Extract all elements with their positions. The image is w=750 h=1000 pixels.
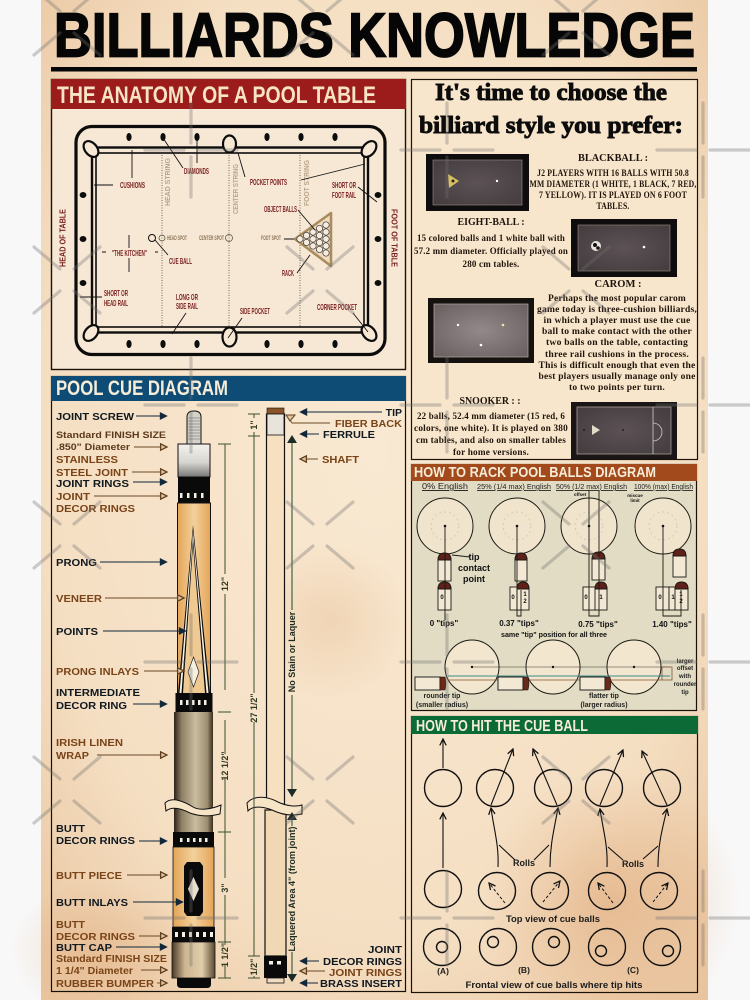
right cue labels [320, 407, 403, 990]
rack heading: HOW TO RACK POOL BALLS DIAGRAM [414, 464, 656, 481]
table labels: RACK [282, 268, 294, 278]
dimension labels: 1/2" [249, 959, 259, 975]
left cue labels: VENEER [56, 593, 102, 605]
frontal caption: Frontal view of cue balls where tip hits [466, 980, 642, 991]
lower diagram labels: (larger radius) [580, 702, 628, 709]
left cue labels [56, 411, 167, 990]
lower diagram: tip radius [415, 640, 672, 694]
row letters: (A) [437, 966, 449, 976]
tip contact point label: tip [468, 552, 480, 562]
stick numbers: 0 [584, 595, 588, 601]
lower diagram labels [416, 659, 697, 709]
dashed spin arrows [489, 881, 668, 903]
eight-ball table [571, 219, 677, 277]
right cue labels: BRASS INSERT [320, 978, 403, 990]
anatomy heading: THE ANATOMY OF A POOL TABLE [57, 82, 376, 109]
lower diagram labels: flatter tip [589, 693, 619, 700]
lower diagram labels: rounder tip [424, 693, 460, 700]
blackball text: 7 YELLOW). IT IS PLAYED ON 6 FOOT [539, 190, 687, 201]
deflection arrows [443, 739, 667, 805]
tip labels [430, 492, 692, 639]
english labels: 100% (max) English [634, 482, 693, 491]
table labels: LONG OR [176, 292, 198, 302]
lower diagram labels: tip [681, 690, 689, 696]
top row balls [424, 770, 680, 806]
stick numbers: 2 [679, 599, 683, 605]
table labels: SIDE RAIL [176, 301, 198, 311]
carom text: Perhaps the most popular carom [548, 294, 686, 304]
title rule [51, 67, 697, 72]
stick numbers: 0 [440, 595, 444, 601]
table labels: FOOT OF TABLE [390, 209, 400, 267]
pool table diagram: HEAD STRING [165, 157, 172, 206]
left cue labels: BUTT INLAYS [56, 897, 128, 909]
blackball text: MM DIAMETER (1 WHITE, 1 BLACK, 7 RED, [530, 179, 697, 190]
eight-ball text [414, 217, 568, 270]
dimension lines [218, 414, 297, 982]
pockets [81, 136, 379, 346]
cue tip positions [438, 490, 688, 620]
right cue labels: TIP [386, 407, 402, 419]
pool table diagram: CENTER STRING [233, 164, 240, 214]
left cue labels: STEEL JOINT [56, 467, 129, 479]
tip labels: same "tip" position for all three [501, 632, 607, 639]
tip labels: 0 "tips" [430, 619, 458, 628]
left cue labels: Standard FINISH SIZE [56, 430, 166, 440]
table labels: FOOT SPOT [261, 235, 281, 242]
table labels: CENTER SPOT [199, 235, 224, 242]
left cue arrows [94, 416, 186, 983]
wave break [165, 800, 221, 816]
rolls labels: Rolls [622, 859, 644, 869]
lower diagram labels: offset [677, 666, 693, 672]
rolls labels [513, 858, 644, 869]
dimension labels: 12" [220, 577, 230, 591]
table labels: HEAD OF TABLE [58, 209, 68, 267]
blackball text: J2 PLAYERS WITH 16 BALLS WITH 50.8 [537, 169, 689, 179]
stick numbers [440, 592, 683, 605]
dimension labels: No Stain or Laquer [287, 611, 297, 692]
carom text [537, 279, 697, 393]
eight-ball text: 57.2 mm diameter. Officially played on [414, 247, 568, 257]
left cue labels: .850" Diameter [56, 442, 131, 452]
carom table [428, 298, 534, 363]
stick numbers: 0 [658, 595, 662, 601]
panel: how to rack pool balls diagram [411, 464, 697, 710]
carom text: best players usually manage only one [538, 372, 696, 382]
table labels: DIAMONDS [184, 166, 209, 176]
tip contact point label: contact [458, 563, 490, 573]
english labels [422, 481, 693, 491]
table labels: OBJECT BALLS [264, 204, 297, 214]
pool cue heading: POOL CUE DIAGRAM [56, 377, 228, 400]
left cue labels: 1 1/4" Diameter [56, 965, 133, 977]
dimension labels: 1" [249, 420, 259, 430]
dimension labels: 27 1/2" [249, 693, 259, 723]
snooker table [571, 402, 677, 459]
pool table diagram [58, 126, 400, 354]
stick numbers: 1 [523, 592, 527, 598]
left cue labels: POINTS [56, 626, 98, 638]
dimension labels: 3" [220, 883, 230, 893]
panel: how to hit the cue ball [411, 716, 698, 992]
table labels: SHORT OR [332, 180, 356, 190]
style heading: It's time to choose the [435, 80, 667, 106]
left cue labels: JOINT RINGS [56, 478, 129, 490]
right cue labels: FIBER BACK [335, 418, 402, 430]
panel: pool cue diagram [51, 376, 406, 992]
row letters: (C) [627, 965, 639, 975]
table labels: SIDE POCKET [240, 306, 270, 316]
blackball text [530, 153, 697, 212]
shaft of cue [247, 408, 302, 983]
snooker text [414, 396, 568, 458]
snooker text: cm tables, and also on smaller tables [416, 436, 566, 446]
leader lines [80, 138, 377, 338]
left cue labels: DECOR RINGS [56, 835, 135, 847]
table labels [58, 166, 400, 316]
stick numbers: 0 [511, 595, 515, 601]
english labels: 25% (1/4 max) English [477, 482, 551, 491]
table labels: CORNER POCKET [317, 302, 357, 312]
left cue labels: BUTT [56, 919, 86, 931]
english labels: 50% (1/2 max) English [556, 482, 627, 491]
table labels: HEAD SPOT [167, 235, 187, 242]
stick numbers: 1 [599, 595, 603, 601]
right cue labels: DECOR RINGS [323, 956, 402, 968]
table labels: FOOT RAIL [332, 190, 356, 200]
table labels: CUE BALL [169, 256, 192, 266]
left cue labels: STAINLESS [56, 454, 118, 466]
right cue labels: JOINT [368, 944, 403, 956]
lower diagram labels: rounder [674, 682, 697, 688]
left cue labels: RUBBER BUMPER [56, 978, 154, 990]
right cue labels: JOINT RINGS [329, 967, 402, 979]
carom text: in which a player must use the cue [544, 316, 690, 326]
english labels: 0% English [422, 481, 468, 491]
left cue labels: WRAP [56, 750, 89, 762]
left cue labels: PRONG INLAYS [56, 666, 139, 678]
right cue arrows [286, 412, 382, 983]
left cue labels: DECOR RINGS [56, 931, 135, 943]
carom text: game today is three-cushion billiards, [537, 305, 697, 315]
tip labels: limit [630, 498, 640, 503]
english balls [417, 498, 691, 554]
hit heading [411, 716, 698, 735]
blackball text: BLACKBALL : [578, 153, 648, 164]
style heading: billiard style you prefer: [419, 113, 683, 139]
tip labels: 1.40 "tips" [652, 620, 692, 629]
table labels: CUSHIONS [120, 180, 145, 190]
snooker text: colors, one white). It is played on 380 [414, 423, 568, 434]
stick numbers: 1 [679, 592, 683, 598]
blackball text: TABLES. [596, 202, 630, 212]
snooker text: for home versions. [453, 448, 529, 458]
rolls labels: Rolls [513, 858, 535, 868]
left cue labels: Standard FINISH SIZE [56, 953, 167, 965]
left cue labels: PRONG [56, 557, 97, 569]
lower diagram labels: larger [677, 659, 694, 665]
carom text: to two points per turn. [569, 383, 665, 393]
left cue labels: INTERMEDIATE [56, 687, 140, 699]
right cue labels: SHAFT [322, 454, 360, 466]
butt of cue [165, 411, 221, 988]
tip contact point label [458, 552, 490, 584]
table labels: HEAD RAIL [104, 298, 128, 308]
left cue labels: DECOR RING [56, 700, 127, 712]
left cue labels: JOINT [56, 491, 91, 503]
dimension labels: Laquered Area 4" (from joint) [287, 827, 297, 951]
wave break [247, 797, 302, 815]
hit heading: HOW TO HIT THE CUE BALL [416, 718, 588, 735]
row letters: (B) [518, 965, 530, 975]
eight-ball text: EIGHT-BALL : [458, 217, 524, 228]
carom text: three rail cushions in the process. [545, 350, 689, 360]
left cue labels: BUTT PIECE [56, 870, 122, 882]
rack and balls [295, 213, 331, 266]
eight-ball text: 280 cm tables. [462, 260, 520, 270]
carom text: This is difficult enough that even the [538, 361, 696, 371]
stick numbers: 2 [523, 599, 527, 605]
left cue labels: BUTT CAP [56, 942, 112, 954]
lower diagram labels: with [678, 674, 691, 680]
dimension labels [220, 420, 297, 975]
left cue labels: DECOR RINGS [56, 503, 135, 515]
middle row balls [424, 870, 678, 910]
snooker text: SNOOKER : : [460, 396, 520, 407]
tip contact point label: point [463, 574, 485, 584]
panel: choose billiard style [412, 80, 698, 460]
pool table diagram: FOOT STRING [304, 159, 311, 206]
carom text: ball to make contact with the other [542, 327, 693, 337]
diamonds [80, 133, 381, 348]
left cue labels: BUTT [56, 823, 86, 835]
dimension labels: 12 1/2" [220, 751, 230, 781]
table labels: SHORT OR [104, 288, 128, 298]
style heading [419, 80, 683, 139]
pool cue heading [51, 376, 406, 401]
dimension labels: 1 1/2" [220, 943, 230, 967]
table labels: POCKET POINTS [250, 177, 287, 187]
top view caption: Top view of cue balls [506, 914, 600, 924]
carom text: CAROM : [594, 279, 642, 290]
row letters [437, 965, 639, 976]
roll arrows [443, 808, 667, 868]
tip labels: 0.75 "tips" [578, 620, 618, 629]
table labels: "THE KITCHEN" [112, 248, 147, 258]
blackball table [426, 154, 529, 211]
snooker text: 22 balls, 52.4 mm diameter (15 red, 6 [417, 411, 565, 422]
tip labels: 0.37 "tips" [499, 619, 539, 628]
left cue labels: IRISH LINEN [56, 737, 123, 749]
lower diagram labels: (smaller radius) [416, 702, 468, 709]
tip labels: miscue [627, 493, 643, 498]
right cue labels: FERRULE [323, 429, 375, 441]
stick numbers: 1 [671, 595, 675, 601]
left cue labels: JOINT SCREW [56, 411, 134, 423]
frontal row balls [424, 928, 680, 966]
carom text: two balls on the table, contacting [546, 338, 688, 348]
panel: anatomy of a pool table [51, 79, 406, 370]
eight-ball text: 15 colored balls and 1 white ball with [417, 234, 565, 244]
tip labels: offset [574, 492, 587, 497]
